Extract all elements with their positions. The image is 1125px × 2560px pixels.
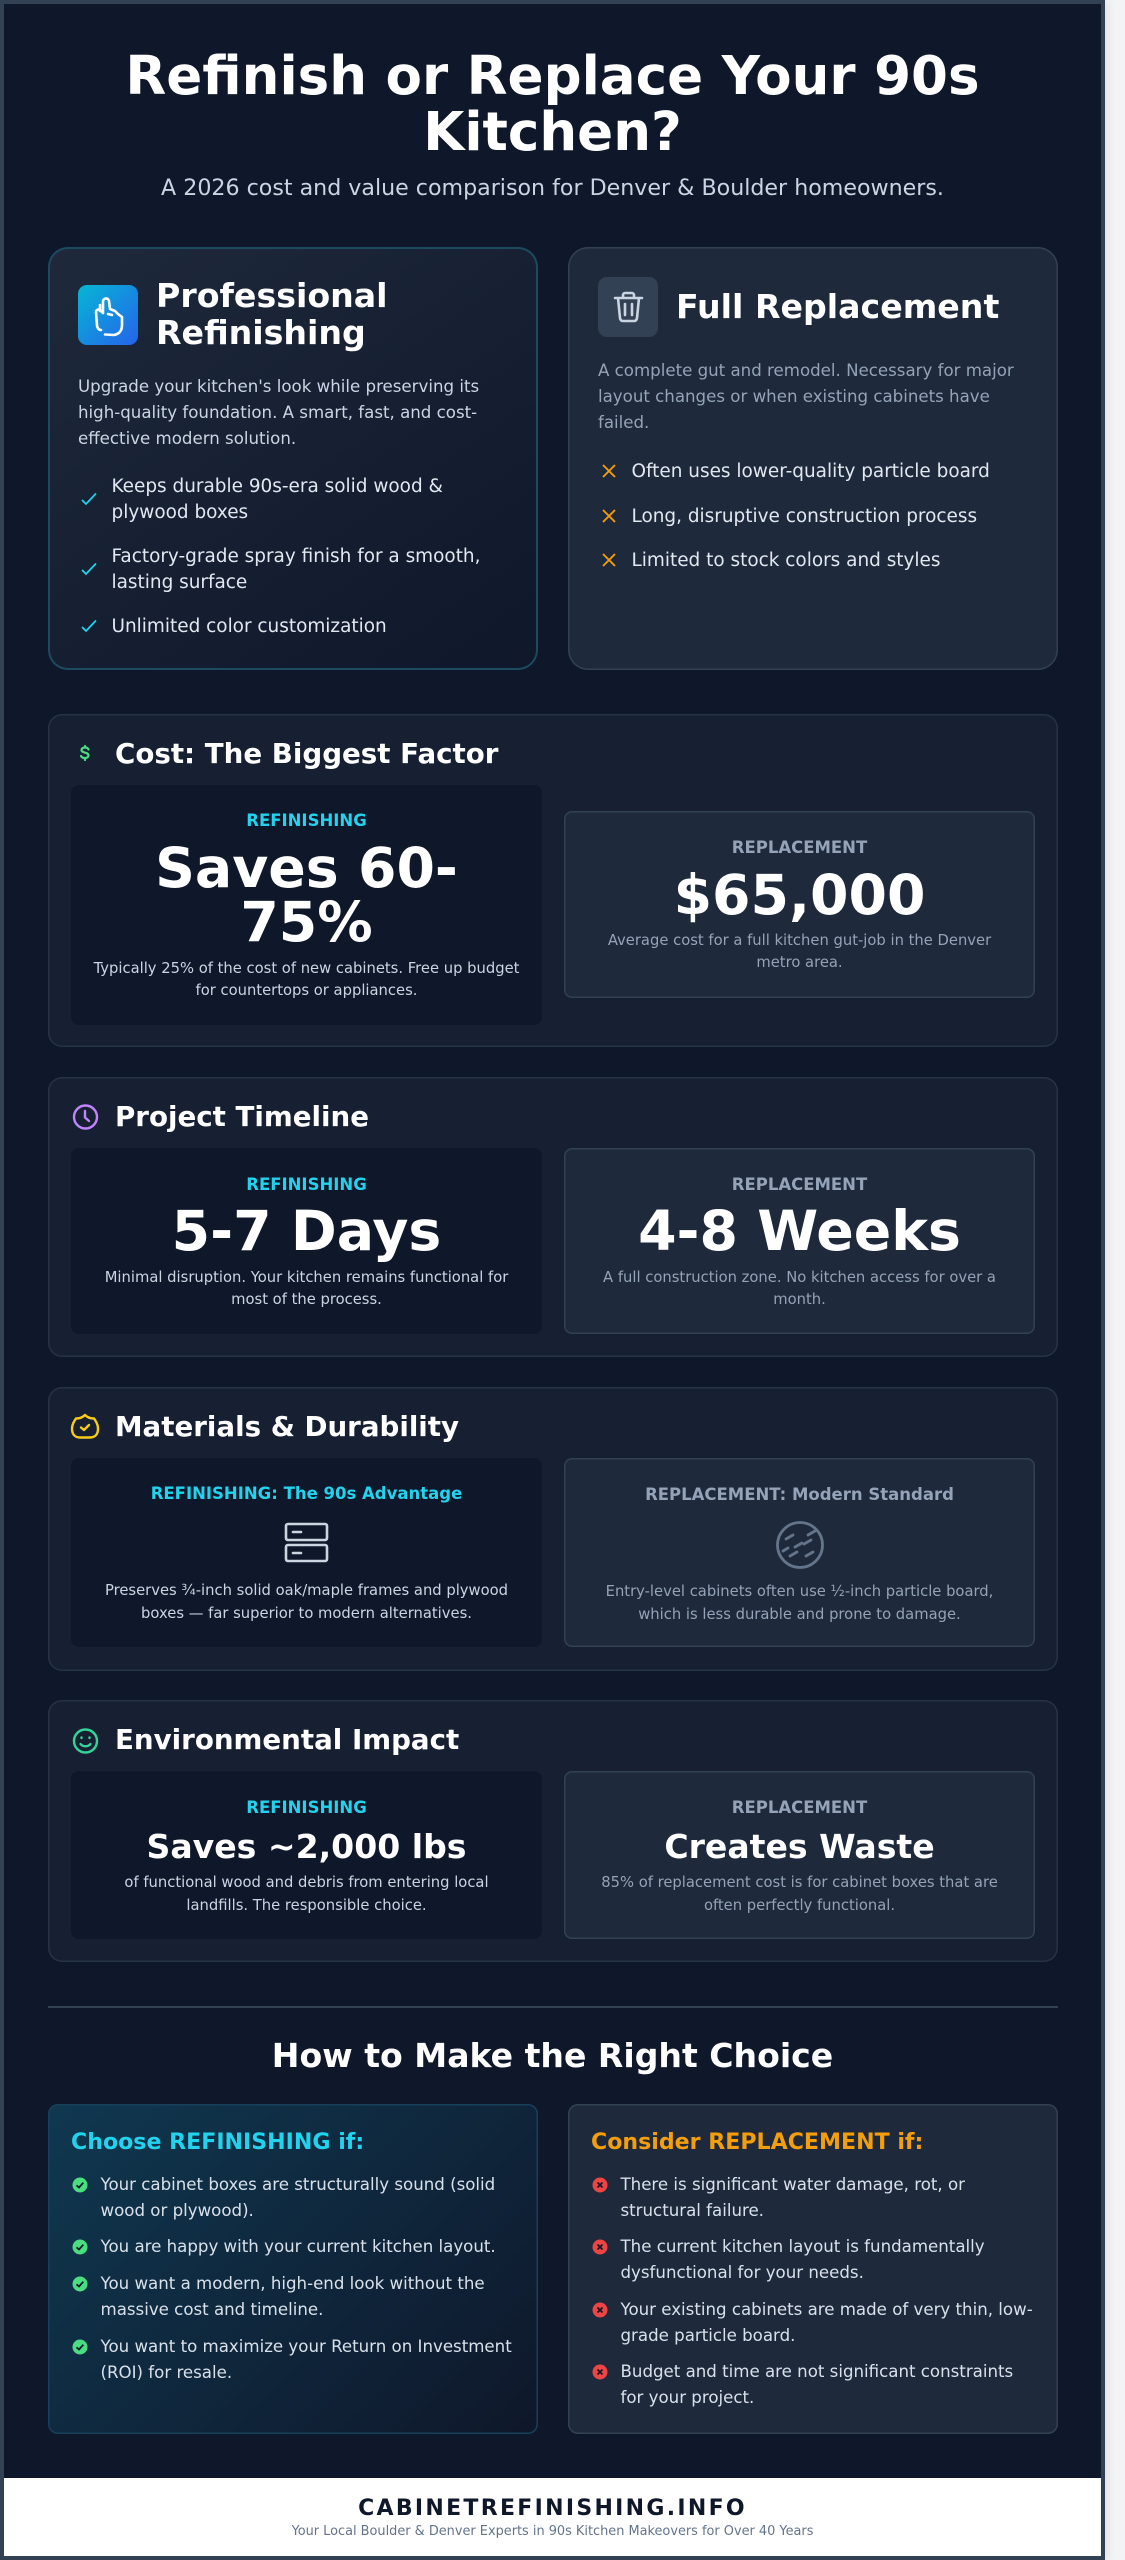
- value: Saves 60-: [155, 837, 458, 901]
- reason 3: [72, 2274, 485, 2319]
- heading: Project Timeline: [115, 1100, 369, 1133]
- title: Refinish or Replace Your 90s: [125, 45, 980, 107]
- reason 4: for your project.: [620, 2388, 754, 2407]
- icon: badge: [70, 1414, 100, 1439]
- icon: clock: [72, 1104, 98, 1130]
- value: Creates Waste: [664, 1827, 935, 1866]
- note: boxes — far superior to modern alternatives.: [141, 1605, 472, 1622]
- reason 4: You want to maximize your Return on Investment: [100, 2337, 512, 2356]
- description: Upgrade your kitchen's look while preserving its: [78, 377, 479, 396]
- note: month.: [773, 1291, 826, 1308]
- drawback list: [602, 461, 990, 571]
- label: REFINISHING: [246, 1175, 367, 1194]
- panel: consider replacement: [568, 2104, 1058, 2434]
- description: [78, 377, 479, 448]
- note: Average cost for a full kitchen gut-job in the Denver: [608, 932, 991, 949]
- refinishing box: [71, 1458, 542, 1647]
- heading: Professional: [156, 276, 388, 315]
- value: 5-7 Days: [172, 1200, 441, 1264]
- panel: environmental: [48, 1700, 1058, 1962]
- note: Minimal disruption. Your kitchen remains functional for: [105, 1269, 508, 1286]
- note: [603, 1269, 996, 1308]
- label: REFINISHING: [246, 1798, 367, 1817]
- value: Saves ~2,000 lbs: [147, 1827, 466, 1866]
- description: high-quality foundation. A smart, fast, and cost-: [78, 403, 477, 422]
- value: 4-8 Weeks: [638, 1200, 961, 1264]
- check item 1: Keeps durable 90s-era solid wood &: [112, 476, 443, 497]
- reason 4: [592, 2362, 1013, 2407]
- x item 1: Often uses lower-quality particle board: [632, 461, 990, 482]
- description: A complete gut and remodel. Necessary for major: [598, 361, 1014, 380]
- heading: Full Replacement: [676, 287, 999, 326]
- description: failed.: [598, 413, 649, 432]
- label: REPLACEMENT: [732, 1175, 867, 1194]
- footer: [4, 2478, 1101, 2556]
- note: A full construction zone. No kitchen access for over a: [603, 1269, 996, 1286]
- note: [601, 1874, 998, 1914]
- check item 2: [81, 546, 480, 593]
- note: often perfectly functional.: [704, 1896, 895, 1914]
- check item 1: plywood boxes: [112, 502, 248, 523]
- note: metro area.: [756, 954, 843, 971]
- note: which is less durable and prone to damage.: [638, 1606, 961, 1623]
- reason 4: Budget and time are not significant constraints: [620, 2362, 1013, 2381]
- replacement box: [564, 1458, 1035, 1647]
- icon: dollar: [80, 745, 90, 761]
- reason 1: There is significant water damage, rot, or: [620, 2175, 965, 2194]
- icon: smile: [72, 1728, 98, 1754]
- panel: timeline: [48, 1077, 1058, 1357]
- heading: Refinishing: [156, 313, 366, 352]
- note: [124, 1874, 489, 1914]
- label: REFINISHING: The 90s Advantage: [151, 1484, 462, 1503]
- reason 1: wood or plywood).: [100, 2201, 254, 2220]
- reason 4: [72, 2337, 512, 2382]
- heading: Cost: The Biggest Factor: [115, 737, 498, 770]
- note: [608, 932, 992, 971]
- heading: Choose REFINISHING if:: [71, 2129, 364, 2155]
- reason 1: [72, 2175, 495, 2220]
- reason 2: The current kitchen layout is fundamentally: [620, 2237, 985, 2256]
- check item 3: Unlimited color customization: [112, 616, 387, 637]
- reason 3: grade particle board.: [620, 2326, 795, 2345]
- value: $65,000: [674, 864, 925, 928]
- note: of functional wood and debris from entering local: [124, 1874, 489, 1891]
- benefit list: [81, 476, 480, 637]
- description: effective modern solution.: [78, 429, 296, 448]
- label: REFINISHING: [246, 811, 367, 830]
- reason 1: structural failure.: [620, 2201, 764, 2220]
- reason 4: (ROI) for resale.: [100, 2363, 232, 2382]
- replacement box: [564, 811, 1035, 998]
- section heading: How to Make the Right Choice: [272, 2036, 833, 2075]
- value: 75%: [240, 891, 373, 955]
- subtitle: A 2026 cost and value comparison for Denver & Boulder homeowners.: [161, 175, 944, 201]
- panel: materials: [48, 1387, 1058, 1671]
- reason 3: You want a modern, high-end look without the: [100, 2274, 485, 2293]
- note: for countertops or appliances.: [196, 982, 417, 999]
- panel: cost: [48, 714, 1058, 1047]
- heading: Environmental Impact: [115, 1723, 459, 1756]
- reason 2: dysfunctional for your needs.: [620, 2263, 864, 2282]
- label: REPLACEMENT: [732, 1798, 867, 1817]
- panel: choose refinishing: [48, 2104, 538, 2434]
- reason 1: [592, 2175, 965, 2220]
- note: [94, 960, 520, 999]
- title: [125, 45, 980, 162]
- icon: cabinet boxes: [284, 1522, 328, 1562]
- title: Kitchen?: [423, 100, 682, 162]
- icon: hand: [78, 285, 138, 345]
- refinishing box: [71, 1148, 542, 1334]
- x item 3: Limited to stock colors and styles: [632, 550, 941, 571]
- note: 85% of replacement cost is for cabinet boxes that are: [601, 1874, 998, 1891]
- description: layout changes or when existing cabinets have: [598, 387, 990, 406]
- note: landfills. The responsible choice.: [186, 1896, 427, 1914]
- replacement box: [564, 1148, 1035, 1334]
- note: Preserves ¾-inch solid oak/maple frames and plywood: [105, 1582, 508, 1599]
- refinishing box: [71, 785, 542, 1025]
- reason 2: [592, 2237, 985, 2282]
- note: Entry-level cabinets often use ½-inch particle board,: [606, 1583, 993, 1600]
- note: [105, 1269, 508, 1308]
- label: REPLACEMENT: Modern Standard: [645, 1485, 954, 1504]
- icon: particle board: [776, 1521, 824, 1569]
- label: REPLACEMENT: [732, 838, 867, 857]
- note: Typically 25% of the cost of new cabinets. Free up budget: [94, 960, 519, 977]
- heading: [156, 276, 388, 352]
- description: [598, 361, 1014, 432]
- reason 3: Your existing cabinets are made of very thin, low-: [620, 2300, 1033, 2319]
- note: [606, 1583, 993, 1623]
- icon: trash: [598, 277, 658, 337]
- check item 2: Factory-grade spray finish for a smooth,: [112, 546, 480, 567]
- reason 1: Your cabinet boxes are structurally sound (solid: [100, 2175, 495, 2194]
- refinishing box: [71, 1771, 542, 1939]
- brand: CABINETREFINISHING.INFO: [358, 2496, 747, 2521]
- reason 3: [592, 2300, 1033, 2345]
- check item 2: lasting surface: [112, 572, 247, 593]
- x item 2: Long, disruptive construction process: [632, 506, 977, 527]
- check item 1: [81, 476, 443, 523]
- reason 3: massive cost and timeline.: [100, 2300, 323, 2319]
- note: [105, 1582, 508, 1622]
- reason 2: You are happy with your current kitchen layout.: [100, 2237, 496, 2256]
- panel: professional refinishing: [48, 247, 538, 670]
- heading: Materials & Durability: [115, 1410, 459, 1443]
- note: most of the process.: [231, 1291, 382, 1308]
- heading: Consider REPLACEMENT if:: [591, 2129, 923, 2155]
- tagline: Your Local Boulder & Denver Experts in 90s Kitchen Makeovers for Over 40 Years: [292, 2524, 813, 2539]
- panel: full replacement: [568, 247, 1058, 670]
- value: [155, 837, 458, 955]
- replacement box: [564, 1771, 1035, 1939]
